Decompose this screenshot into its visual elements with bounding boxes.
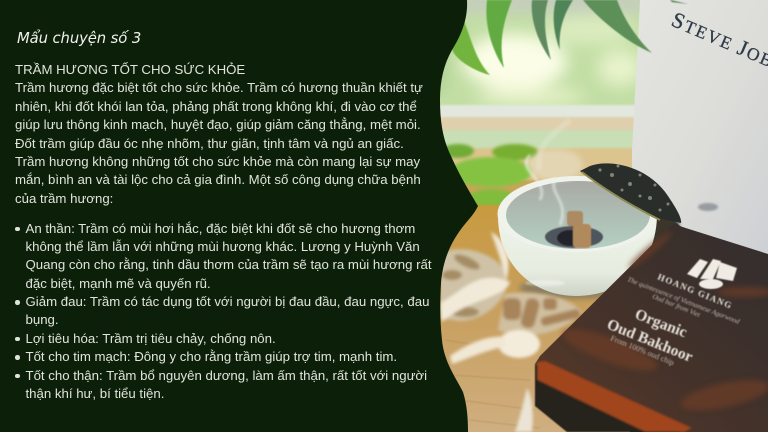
white book box with printed name <box>632 0 768 262</box>
dark metal lid <box>580 163 681 223</box>
hanging green leaves <box>452 0 688 75</box>
box labels: From 100% oud chip <box>609 334 675 367</box>
bullet: kidneys <box>15 366 432 403</box>
ceramic incense bowl <box>498 120 657 299</box>
bullet: calming: Quang còn cho rằng, tinh dầu thơm của trầm sẽ tạo ra mùi hương rất <box>26 257 432 272</box>
box labels: Organic <box>633 306 689 341</box>
text block: intro paragraph: Trầm hương đặc biệt tốt cho sức khỏe. Trầm có hương thuần khiết tự <box>15 80 423 95</box>
bullet: digestion: Lợi tiêu hóa: Trầm trị tiêu chảy, chống nôn. <box>26 331 276 346</box>
box labels <box>605 272 741 367</box>
wood table foreground <box>430 205 630 432</box>
oud bakhoor product box <box>535 224 768 432</box>
window background <box>430 0 650 110</box>
box labels: Oud Bakhoor <box>605 316 695 366</box>
text block: intro paragraph: giúp lưu thông kinh mạch, huyệt đạo, giúp giảm căng thẳng, mệt mỏi. <box>15 117 421 132</box>
bullet: calming: không thể lầm lẫn với những mùi hương khác. Lương y Huỳnh Văn <box>26 239 420 254</box>
text block: intro paragraph: TRẦM HƯƠNG TỐT CHO SỨC KHỎE <box>15 62 245 77</box>
bullet: calming: đặc biệt, mạnh mẽ và quyến rũ. <box>26 276 211 291</box>
incense cones <box>545 211 603 248</box>
bullet: pain relief: bụng. <box>26 312 59 327</box>
window sill and table <box>430 105 640 220</box>
blurred green leaves behind bowl <box>442 144 538 213</box>
bullet: pain relief <box>15 293 432 330</box>
box labels: The quintessence of Vietnamese Agarwood <box>626 275 741 326</box>
text block: intro paragraph: Đốt trầm giúp đầu óc nhẹ nhõm, thư giãn, tịnh tâm và ngủ an giấc. <box>15 136 404 150</box>
text block: intro paragraph <box>15 62 423 206</box>
smoke <box>526 120 570 225</box>
box logo <box>687 259 737 289</box>
text block: intro paragraph: của trầm hương: <box>15 191 113 206</box>
sachets of bakhoor <box>440 232 582 432</box>
text block: intro paragraph: mắn, bình an và tài lộc cho cả gia đình. Một số công dụng chữa bệnh <box>15 172 421 187</box>
bullet: calming: An thần: Trầm có mùi hơi hắc, đặc biệt khi đốt sẽ cho hương thơm <box>26 220 415 236</box>
text block: intro paragraph: nhiên, khi đốt khói lan tỏa, phảng phất trong không khí, đi vào cơ thể <box>15 99 417 114</box>
bullet: heart: Tốt cho tim mạch: Đông y cho rằng trầm giúp trợ tim, mạnh tim. <box>26 349 397 364</box>
bullet: kidneys: thận khí hư, bí tiểu tiện. <box>26 386 164 401</box>
bullet: pain relief: Giảm đau: Trầm có tác dụng tốt với người bị đau đầu, đau ngực, đau <box>26 294 429 309</box>
bullet: calming <box>15 220 432 293</box>
box labels: Oud bar from Viet <box>651 292 702 319</box>
shadow between bowl and box <box>625 195 680 270</box>
dark green wavy panel <box>0 0 478 432</box>
bullet: kidneys: Tốt cho thận: Trầm bổ nguyên dương, làm ấm thận, rất tốt với người <box>26 368 427 382</box>
bullet list: medicinal uses <box>15 220 432 401</box>
text block: intro paragraph: Trầm hương không những tốt cho sức khỏe mà còn mang lại sự may <box>15 154 420 169</box>
box labels: HOANG GIANG <box>656 272 734 311</box>
heading: story number: Mẩu chuyện số 3 <box>17 30 141 47</box>
